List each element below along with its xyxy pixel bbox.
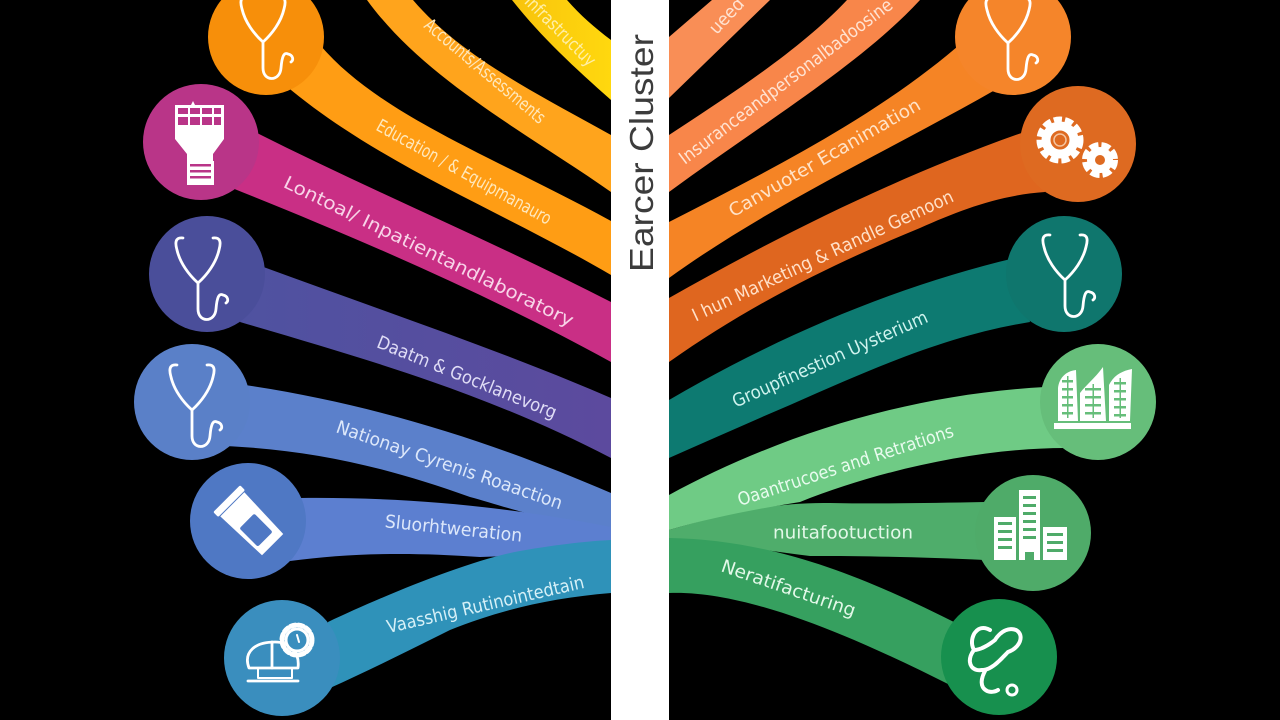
node: light green towers (1040, 344, 1156, 460)
icon: control tower (175, 101, 224, 185)
node: teal machine (224, 600, 340, 716)
icon: stethoscope (1043, 235, 1095, 316)
node: dark green stethoscope cluster (941, 599, 1057, 715)
icon: stethoscope (986, 0, 1038, 80)
icon: pill bottle (213, 485, 286, 558)
icon: tangled stethoscope (970, 628, 1021, 695)
label: magenta ribbon: Lontoal/ Inpatientandlaboratory (280, 172, 577, 332)
ribbon: burnt orange (669, 130, 1045, 362)
ribbon: magenta (232, 132, 611, 362)
label: blue 2 ribbon: Sluorhtweration (384, 511, 523, 547)
node: teal stethoscope right (1006, 216, 1122, 332)
label: burnt orange ribbon: I hun Marketing & Randle Gemoon (689, 186, 957, 326)
ribbon: peach 1 (669, 0, 770, 98)
node: burnt orange gears (1020, 86, 1136, 202)
label: orange ribbon: Canvuoter Ecanimation (725, 95, 924, 222)
label: dark teal ribbon: Groupfinestion Uysterium (729, 307, 931, 412)
node: blue stethoscope (134, 344, 250, 460)
node: green buildings (975, 475, 1091, 591)
label: light green ribbon: Oaantrucoes and Retrations (735, 421, 956, 511)
icon: machine and gear (247, 625, 312, 681)
ribbon: dark green (669, 538, 960, 685)
ribbon: orange 2 (285, 45, 611, 275)
ribbon: yellow (512, 0, 611, 100)
ribbon: orange 1 (367, 0, 611, 192)
ribbon: peach 2 (669, 0, 920, 192)
left ribbon group (225, 0, 611, 688)
ribbon: purple (240, 265, 611, 458)
title: Earcer Cluster (623, 34, 660, 272)
ribbon: blue 1 (225, 385, 611, 530)
label: orange 1 ribbon: Accounts/Assessments (420, 15, 550, 128)
icon: gears (1040, 120, 1115, 175)
icon: curved towers (1054, 367, 1132, 429)
label: dark green ribbon: Neratifacturing (718, 556, 858, 622)
node: orange stethoscope left (208, 0, 324, 95)
node: orange stethoscope right (955, 0, 1071, 95)
label: blue 1 ribbon: Nationay Cyrenis Roaaction (333, 417, 565, 514)
ribbon: orange (669, 40, 995, 278)
label: teal blue ribbon: Vaasshig Rutinointedtain (385, 572, 586, 638)
icon: stethoscope (176, 238, 228, 320)
ribbon: dark teal (669, 258, 1030, 458)
label: purple ribbon: Daatm & Gocklanevorg (374, 332, 560, 423)
node: blue bottle (190, 463, 306, 579)
ribbon: teal blue (328, 540, 611, 688)
right ribbon group (669, 0, 1065, 685)
node: purple stethoscope (149, 216, 265, 332)
icon: buildings (994, 490, 1067, 560)
label: orange 2 ribbon: Education / & Equipmanauro (373, 116, 555, 229)
node: magenta tower (143, 84, 259, 200)
label: green mid ribbon: nuitafootuction (773, 522, 913, 543)
ribbon: blue 2 (290, 498, 611, 561)
icon: stethoscope (241, 0, 293, 78)
ribbon: green mid (669, 502, 985, 560)
icon: stethoscope (170, 365, 222, 446)
ribbon: light green (669, 387, 1065, 530)
center white column (611, 0, 669, 720)
